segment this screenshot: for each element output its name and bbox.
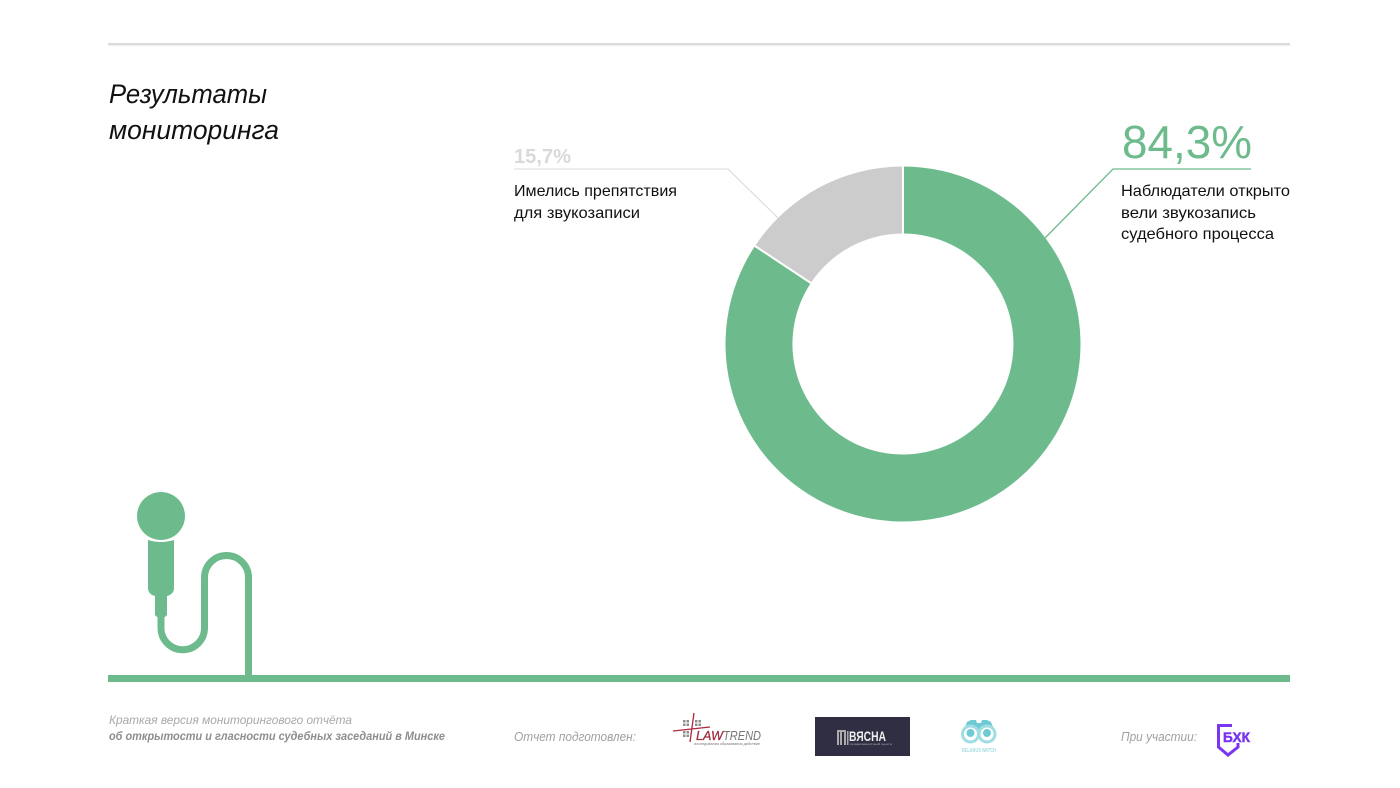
logo: Lawtrend: TREND — [723, 728, 761, 743]
callout: 84.3%: вели звукозапись — [1121, 205, 1256, 222]
title: мониторинга — [109, 115, 279, 145]
logo: Viasna — [815, 717, 910, 756]
logo: BHC: БХК — [1223, 729, 1250, 745]
callout: 84.3%: 84,3% — [1122, 116, 1252, 168]
callout: 84.3%: Наблюдатели открыто — [1121, 183, 1290, 200]
footer: with participation: При участии: — [1121, 729, 1197, 744]
footer: prepared by: Отчет подготовлен: — [514, 729, 636, 744]
callout: 84.3%: судебного процесса — [1121, 226, 1274, 243]
footer: report description: об открытости и гласности судебных заседаний в Минске — [109, 729, 445, 743]
logo: Viasna: правозащитный центр — [850, 742, 892, 746]
callout: 15.7%: для звукозаписи — [514, 205, 640, 222]
callout: 15.7%: 15,7% — [514, 146, 571, 168]
footer: report description: Краткая версия мониторингового отчёта — [109, 713, 352, 727]
title — [109, 79, 279, 145]
logo: Lawtrend — [673, 713, 761, 746]
icon: microphone — [137, 492, 248, 676]
segment: 15.7% — [755, 166, 903, 283]
title: Результаты — [109, 79, 267, 109]
logo: Belarus Watch — [961, 720, 996, 754]
logo: Viasna: ВЯСНА — [849, 729, 886, 744]
footer: report description — [109, 713, 445, 743]
logo: Lawtrend: исследования образования действие — [694, 741, 761, 746]
logo: BHC — [1218, 726, 1250, 755]
logo: Belarus Watch: BELARUS WATCH — [962, 748, 996, 754]
segment: 84.3% — [725, 166, 1080, 522]
logo: Lawtrend: LAW — [696, 728, 725, 743]
callout: 15.7% — [514, 146, 778, 222]
donut chart — [725, 166, 1080, 521]
callout: 84.3% — [1045, 116, 1290, 243]
ground line — [108, 675, 1290, 682]
callout: 15.7%: Имелись препятствия — [514, 183, 677, 200]
